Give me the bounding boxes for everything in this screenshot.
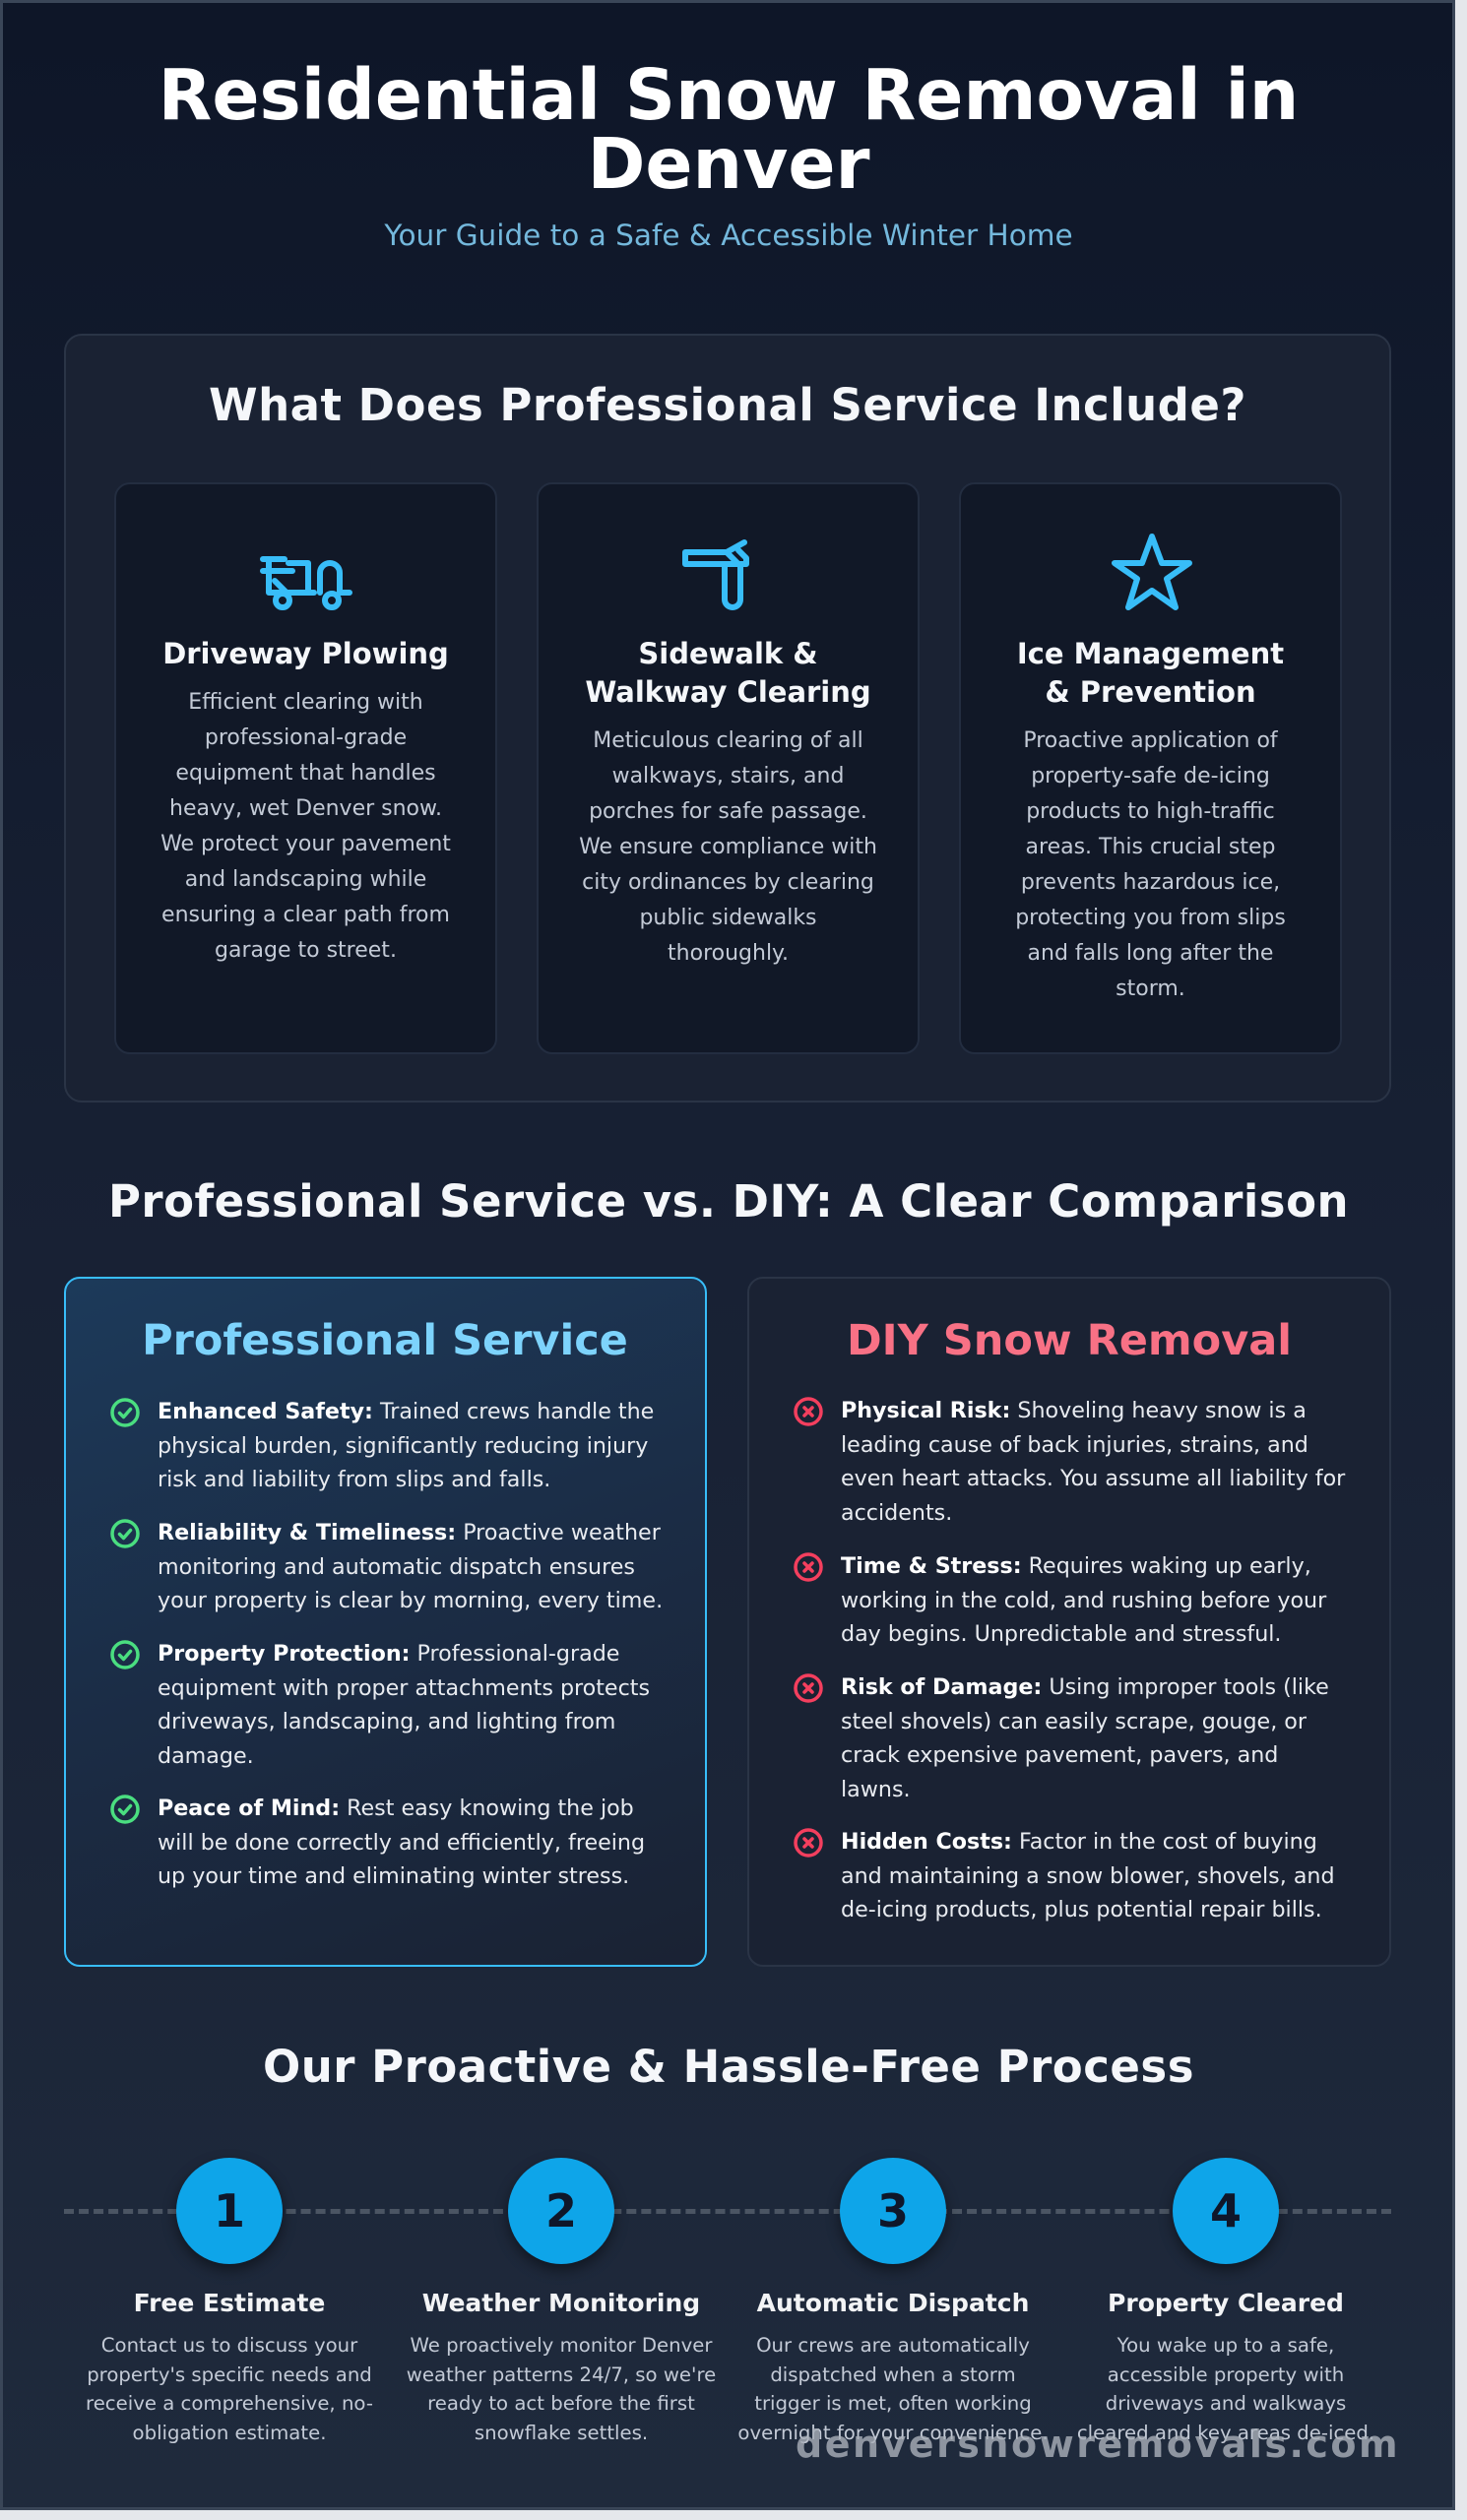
card: ice management bbox=[959, 482, 1342, 1054]
step 4: 4 bbox=[1210, 2184, 1242, 2237]
step 1: Free Estimate bbox=[134, 2289, 325, 2317]
step 3: Automatic Dispatch bbox=[757, 2289, 1029, 2317]
card: driveway plowing: Driveway Plowing bbox=[162, 637, 449, 670]
step 1: 1 bbox=[214, 2184, 245, 2237]
step 1: Contact us to discuss your bbox=[101, 2334, 357, 2357]
panel: DIY bbox=[747, 1277, 1391, 1967]
item: damage: Risk of Damage: Using improper tools (like steel shovels) can easily scrape, gouge, or crack expensive pavement, pavers, and lawns. bbox=[841, 1674, 1329, 1801]
item: time & stress: Time & Stress: Requires waking up early, working in the cold, and rushing before your day begins. Unpredictable and stressful. bbox=[841, 1553, 1326, 1647]
heading: DIY: DIY Snow Removal bbox=[847, 1316, 1292, 1365]
card: ice management: & Prevention bbox=[1045, 675, 1256, 709]
subtitle: Your Guide to a Safe & Accessible Winter Home bbox=[384, 219, 1073, 252]
step 2 bbox=[407, 2158, 716, 2443]
card: sidewalk clearing: Meticulous clearing of all walkways, stairs, and porches for safe passage. We ensure compliance with city ordinances by clearing public sidewalks thoroughly. bbox=[579, 728, 877, 966]
card: ice management: Proactive application of property-safe de-icing products to high-traffic areas. This crucial step prevents hazardous ice, protecting you from slips and falls long after the storm. bbox=[1015, 728, 1286, 1001]
step 3 bbox=[737, 2158, 1049, 2443]
title bbox=[159, 54, 1299, 205]
step 4: cleared and key areas de-iced. bbox=[1077, 2422, 1374, 2443]
step 2: 2 bbox=[545, 2184, 577, 2237]
watermark: denversnowremovals.com bbox=[796, 2423, 1400, 2466]
step 2: Weather Monitoring bbox=[422, 2289, 700, 2317]
step 3: Our crews are automatically bbox=[756, 2334, 1030, 2357]
title: Residential Snow Removal in bbox=[159, 54, 1299, 136]
step 3: trigger is met, often working bbox=[754, 2392, 1032, 2415]
process heading: Our Proactive & Hassle-Free Process bbox=[263, 2041, 1194, 2093]
step 4: Property Cleared bbox=[1108, 2289, 1344, 2317]
card: sidewalk clearing: Walkway Clearing bbox=[585, 675, 871, 709]
panel: services bbox=[64, 334, 1391, 1102]
step 2: weather patterns 24/7, so we're bbox=[407, 2362, 716, 2386]
step 4: accessible property with bbox=[1108, 2362, 1344, 2386]
item: hidden costs: Hidden Costs: Factor in the cost of buying and maintaining a snow blower, shovels, and de-icing products, plus potential repair bills. bbox=[841, 1829, 1335, 1922]
process timeline bbox=[64, 2158, 1391, 2443]
step 3: 3 bbox=[877, 2184, 909, 2237]
card: driveway plowing: Efficient clearing with professional-grade equipment that handles heavy, wet Denver snow. We protect your pavement and landscaping while ensuring a clear path from garage to street. bbox=[160, 690, 451, 963]
item: safety: Enhanced Safety: Trained crews handle the physical burden, significantly reducing injury risk and liability from slips and falls. bbox=[158, 1399, 654, 1492]
card: ice management: Ice Management bbox=[1017, 637, 1284, 670]
icon: star bbox=[1112, 534, 1192, 610]
item: peace of mind: Peace of Mind: Rest easy knowing the job will be done correctly and efficiently, freeing up your time and eliminating winter stress. bbox=[158, 1796, 645, 1889]
step 3: dispatched when a storm bbox=[770, 2362, 1016, 2386]
panel heading: What Does Professional Service Include? bbox=[209, 379, 1246, 431]
step 1: property's specific needs and bbox=[87, 2362, 372, 2386]
card: sidewalk clearing bbox=[537, 482, 920, 1054]
panel: professional service bbox=[64, 1277, 707, 1967]
comparison heading: Professional Service vs. DIY: A Clear Comparison bbox=[108, 1175, 1349, 1228]
step 4: You wake up to a safe, bbox=[1117, 2334, 1334, 2357]
step 4 bbox=[1077, 2158, 1374, 2443]
icon: plow bbox=[260, 556, 352, 610]
step 2: ready to act before the first bbox=[427, 2392, 695, 2415]
heading: professional: Professional Service bbox=[142, 1316, 628, 1365]
title: Denver bbox=[587, 123, 870, 205]
card: sidewalk clearing: Sidewalk & bbox=[638, 637, 818, 670]
icon: shovel bbox=[682, 539, 749, 610]
card: driveway plowing bbox=[114, 482, 497, 1054]
step 2: We proactively monitor Denver bbox=[410, 2334, 713, 2357]
step 3: overnight for your convenience. bbox=[737, 2422, 1049, 2443]
item: reliability: Reliability & Timeliness: Proactive weather monitoring and automatic dispatch ensures your property is clear by morning, every time. bbox=[158, 1520, 663, 1613]
step 4: driveways and walkways bbox=[1106, 2392, 1346, 2415]
step 1: obligation estimate. bbox=[133, 2422, 326, 2443]
step 1: receive a comprehensive, no- bbox=[86, 2392, 373, 2415]
step 2: snowflake settles. bbox=[475, 2422, 648, 2443]
item: protection: Property Protection: Professional-grade equipment with proper attachments protects driveways, landscaping, and lighting from damage. bbox=[158, 1641, 650, 1768]
item: physical risk: Physical Risk: Shoveling heavy snow is a leading cause of back injuries, strains, and even heart attacks. You assume all liability for accidents. bbox=[841, 1398, 1345, 1526]
step 1 bbox=[86, 2158, 373, 2443]
